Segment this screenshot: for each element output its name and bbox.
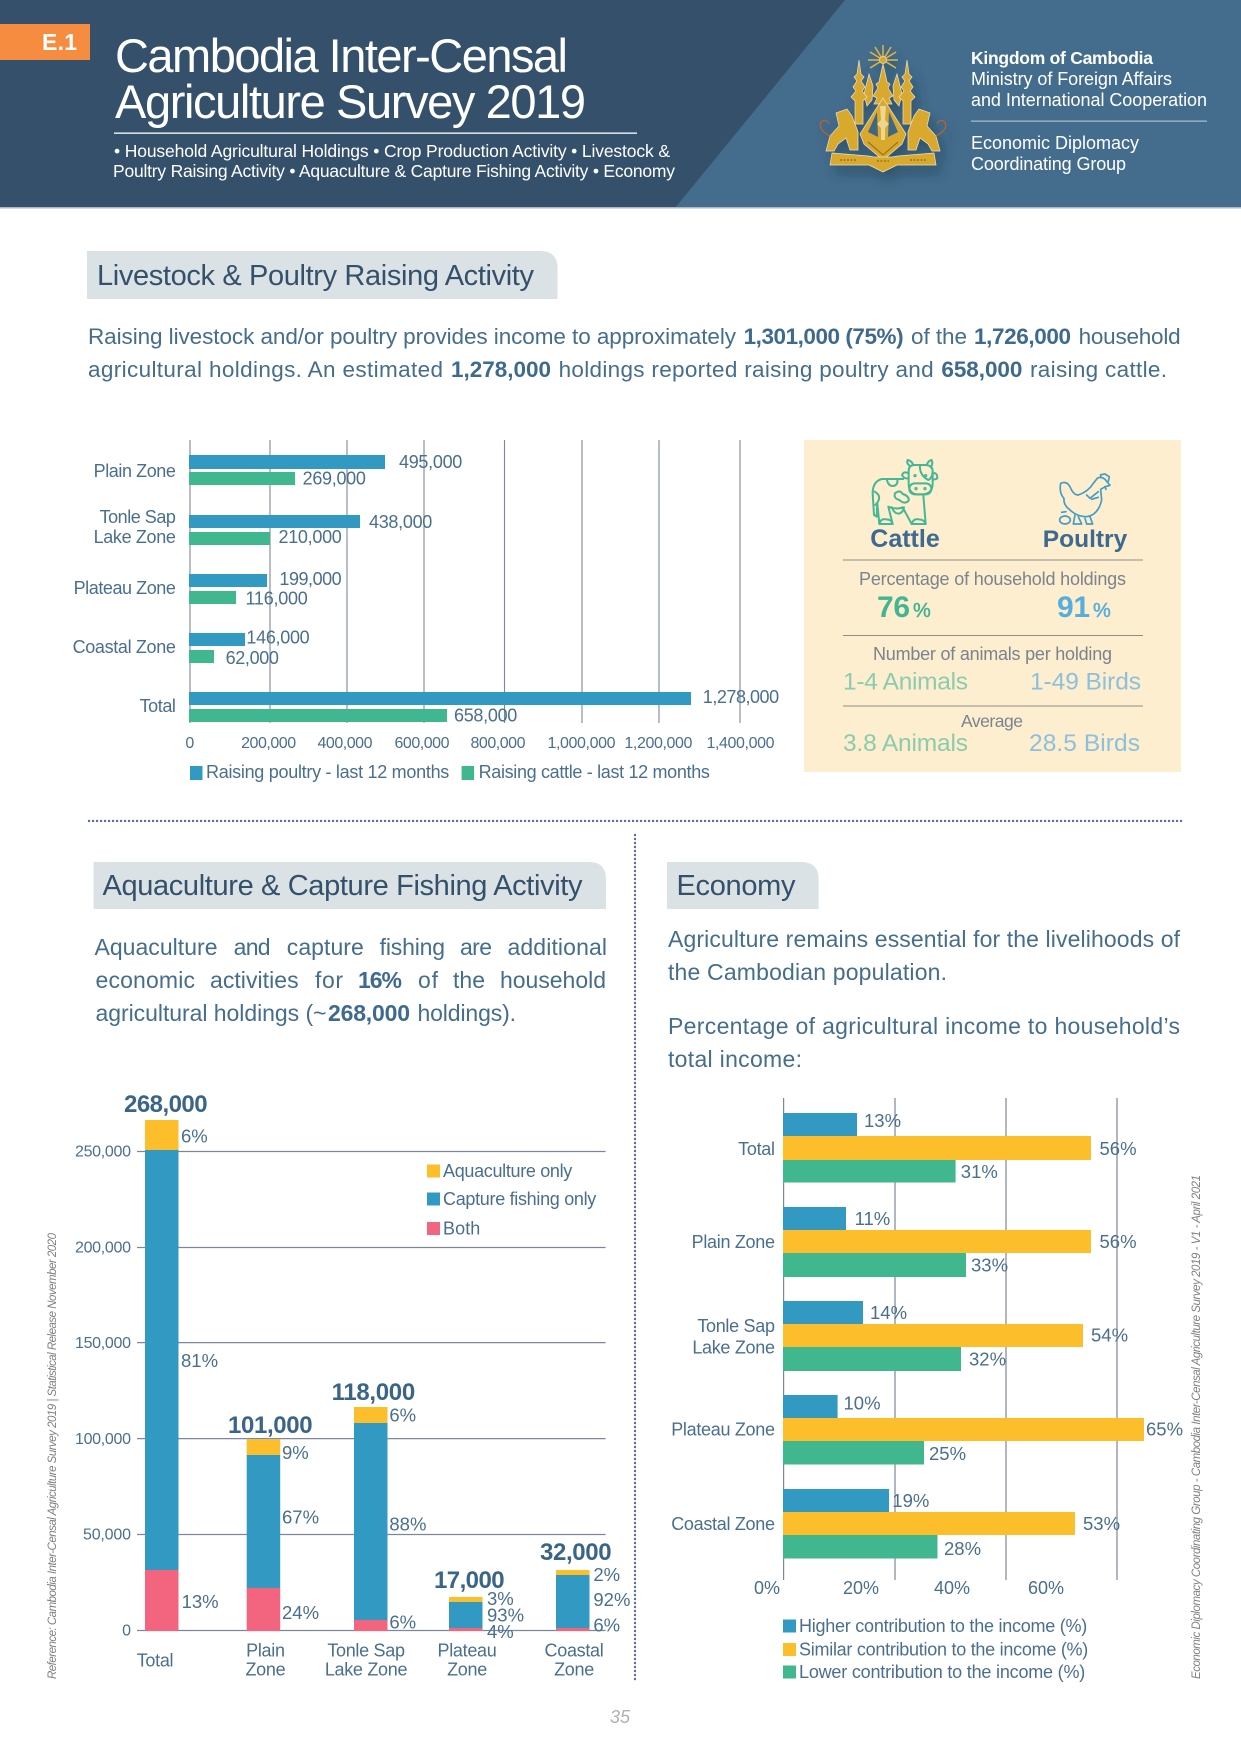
title: Agriculture Survey 2019 (115, 75, 586, 128)
zone labels: Plain Zone (94, 461, 176, 481)
percentage labels: 13% (182, 1591, 219, 1612)
title: Cambodia Inter-Censal (115, 29, 568, 82)
side note: reference: Reference: Cambodia Inter-Censal Agriculture Survey 2019 | Statistical Release November 2020 (47, 1232, 59, 1679)
gridlines (137, 1152, 606, 1630)
zone labels: Coastal Zone (73, 637, 176, 657)
value labels (844, 1110, 1183, 1559)
average animals: 28.5 Birds (1029, 730, 1140, 757)
text block: aquaculture intro: the (453, 967, 485, 993)
axis labels: 0 (185, 735, 194, 752)
text block: livestock intro: agricultural holdings. An estimated (88, 357, 443, 382)
y axis labels: 200,000 (75, 1240, 131, 1256)
totals: 32,000 (540, 1539, 611, 1566)
cattle bars (189, 472, 447, 722)
value labels: 54% (1091, 1324, 1128, 1346)
page number: 35 (610, 1707, 631, 1727)
text block: aquaculture intro: of (418, 967, 439, 993)
y axis labels: 150,000 (75, 1335, 131, 1352)
text block: livestock intro: holdings reported raising poultry and (559, 357, 934, 382)
higher contribution bars (783, 1113, 889, 1512)
average animals (843, 711, 1140, 757)
value labels: 269,000 (303, 468, 366, 488)
bar: Total (145, 1120, 178, 1631)
zone labels: Lake Zone (94, 527, 176, 547)
text block: livestock intro: raising cattle. (1030, 357, 1167, 382)
heading: Aquaculture & Capture Fishing Activity (94, 862, 606, 909)
value labels: 210,000 (278, 527, 342, 547)
value labels: 32% (969, 1348, 1006, 1370)
text block: aquaculture intro: additional (508, 934, 607, 960)
axis labels (754, 1578, 1064, 1598)
bar: Tonle Sap Lake Zone (354, 1407, 388, 1631)
zone labels: Lake Zone (692, 1338, 775, 1358)
value labels: 31% (961, 1161, 998, 1182)
bar chart: agricultural income share (671, 1098, 1183, 1682)
axis labels: 400,000 (318, 735, 373, 752)
text block: aquaculture intro: economic (96, 967, 195, 993)
text block: aquaculture intro: agricultural holdings (~ (96, 1000, 326, 1026)
y axis labels: 0 (122, 1622, 131, 1640)
zone labels: Total (137, 1650, 173, 1670)
zone labels: Zone (245, 1660, 286, 1680)
axis labels: 20% (843, 1578, 879, 1598)
value labels: 1,278,000 (703, 687, 779, 707)
y axis labels: 250,000 (75, 1144, 131, 1160)
zone labels: Plateau Zone (671, 1420, 775, 1440)
value labels: 56% (1100, 1138, 1137, 1159)
axis labels: 800,000 (470, 735, 526, 752)
zone labels: Zone (447, 1660, 487, 1680)
subtitle topics: • Household Agricultural Holdings • Crop Production Activity • Livestock & (114, 141, 670, 161)
animals per holding: 1-4 Animals (843, 668, 968, 696)
text block: livestock intro: Raising livestock and/or poultry provides income to approximately (88, 324, 737, 349)
value labels: 53% (1083, 1513, 1120, 1534)
totals: 268,000 (124, 1091, 207, 1118)
value labels: 65% (1146, 1418, 1183, 1440)
text block: livestock intro: 658,000 (941, 357, 1022, 382)
legend (783, 1616, 1088, 1682)
y axis labels (75, 1144, 131, 1640)
zone labels: Plain (246, 1640, 285, 1660)
text block: aquaculture intro: capture (287, 934, 364, 960)
zone labels: Coastal Zone (671, 1514, 775, 1534)
text block: aquaculture intro: and (234, 934, 271, 960)
text block: aquaculture intro: fishing (380, 934, 445, 960)
bar: Plateau Zone (449, 1597, 482, 1631)
value labels: 658,000 (454, 706, 517, 726)
subtitle topics: Poultry Raising Activity • Aquaculture & Capture Fishing Activity • Economy (113, 161, 675, 181)
text block: livestock intro: 1,726,000 (974, 324, 1071, 349)
text block: aquaculture intro: Aquaculture (94, 934, 218, 960)
axis labels (185, 735, 775, 752)
zone labels: Plain Zone (692, 1232, 775, 1252)
stacked bar chart: fishing activity by zone (75, 1091, 630, 1680)
animals per holding: 1-49 Birds (1030, 668, 1141, 696)
percentage labels: 6% (181, 1126, 208, 1146)
heading: Livestock & Poultry Raising Activity: Livestock & Poultry Raising Activity (97, 260, 534, 292)
header banner (0, 0, 1241, 208)
zone labels: Tonle Sap (327, 1640, 405, 1660)
percentage of holdings: Percentage of household holdings (859, 569, 1126, 589)
value labels (226, 452, 779, 726)
legend: Aquaculture only (443, 1161, 572, 1181)
text block: economy intro: Percentage of agricultural income to household’s (668, 1013, 1180, 1039)
value labels: 199,000 (279, 569, 342, 589)
bar: Plain Zone (247, 1439, 280, 1631)
percentage labels: 4% (487, 1621, 514, 1642)
value labels: 19% (892, 1490, 929, 1511)
value labels: 438,000 (369, 512, 432, 532)
zone labels (73, 461, 176, 716)
ministry text: Coordinating Group (971, 154, 1126, 174)
animals per holding: Number of animals per holding (873, 644, 1112, 664)
subtitle topics (113, 132, 675, 181)
value labels: 11% (855, 1208, 890, 1229)
average animals: 3.8 Animals (843, 730, 968, 757)
zone labels: Lake Zone (325, 1660, 407, 1680)
axis labels: 1,000,000 (548, 735, 616, 752)
legend: Similar contribution to the income (%) (799, 1640, 1088, 1660)
panel: cattle and poultry facts (804, 440, 1181, 772)
section badge (0, 24, 90, 60)
bar: Coastal Zone (556, 1570, 590, 1631)
axis labels: 1,200,000 (624, 735, 692, 752)
zone labels: Plateau (438, 1640, 496, 1660)
axis labels: 1,400,000 (706, 735, 775, 752)
value labels: 146,000 (246, 628, 310, 648)
zone labels: Total (738, 1139, 775, 1159)
percentage of holdings: 91 (1057, 591, 1090, 624)
value labels: 14% (870, 1302, 907, 1323)
legend: Both (443, 1218, 480, 1238)
ministry text (971, 48, 1207, 174)
text block: aquaculture intro: are (460, 934, 492, 960)
zone labels: Tonle Sap (697, 1316, 775, 1336)
heading: Economy: Economy (676, 870, 796, 902)
gridlines (784, 1098, 1117, 1580)
heading: Livestock & Poultry Raising Activity (87, 251, 558, 299)
text block: economy intro: Agriculture remains essential for the livelihoods of (668, 926, 1181, 952)
legend: Higher contribution to the income (%) (799, 1616, 1087, 1636)
value labels: 13% (864, 1110, 901, 1131)
ministry text: Economic Diplomacy (971, 133, 1139, 153)
percentage of holdings: % (913, 600, 931, 622)
text block: aquaculture intro: 268,000 (328, 1000, 410, 1026)
percentage labels: 67% (282, 1506, 319, 1528)
ministry text: and International Cooperation (971, 90, 1207, 110)
axis labels: 0% (754, 1578, 780, 1598)
text block: aquaculture intro: household (500, 967, 606, 993)
legend: Raising cattle - last 12 months (479, 762, 710, 782)
legend: Lower contribution to the income (%) (799, 1662, 1085, 1682)
icon: royal coat of arms (820, 45, 946, 172)
percentage labels: 9% (282, 1442, 309, 1463)
lower contribution bars (783, 1160, 966, 1558)
animals per holding (843, 644, 1141, 696)
column titles (870, 525, 1128, 553)
text block: aquaculture intro: 16% (358, 967, 402, 993)
text block: economy intro: the Cambodian population. (668, 959, 947, 985)
legend: Raising poultry - last 12 months (206, 762, 449, 782)
value labels: 495,000 (399, 452, 462, 472)
title (115, 29, 586, 128)
column titles: Cattle (870, 525, 940, 553)
ministry text: Kingdom of Cambodia (971, 48, 1153, 68)
y axis labels: 50,000 (83, 1526, 131, 1544)
similar contribution bars (783, 1136, 1144, 1535)
text block: livestock intro: household (1079, 324, 1181, 349)
average animals: Average (961, 711, 1023, 731)
zone labels: Plateau Zone (74, 578, 176, 598)
zone labels: Zone (554, 1660, 594, 1680)
text block: livestock intro: 1,278,000 (451, 357, 551, 382)
axis labels: 60% (1028, 1578, 1064, 1598)
axis labels: 200,000 (241, 735, 296, 752)
text block: economy intro: total income: (668, 1046, 802, 1072)
axis labels: 40% (934, 1578, 970, 1598)
legend (190, 762, 710, 782)
axis labels: 600,000 (394, 735, 450, 752)
percentage labels: 3% (487, 1588, 514, 1609)
value labels: 116,000 (246, 588, 308, 608)
percentage labels: 2% (593, 1564, 620, 1585)
text block: aquaculture intro (94, 934, 607, 1026)
value labels: 33% (971, 1254, 1008, 1276)
percentage labels: 6% (593, 1614, 620, 1636)
totals (124, 1091, 611, 1594)
legend (427, 1161, 596, 1238)
zone labels: Total (140, 696, 176, 716)
totals: 118,000 (332, 1379, 415, 1406)
zone labels (671, 1139, 775, 1534)
legend: Capture fishing only (443, 1189, 596, 1209)
totals: 17,000 (434, 1567, 504, 1594)
percentage labels (181, 1126, 630, 1642)
icon: cow (873, 460, 937, 524)
value labels: 56% (1100, 1231, 1137, 1252)
text block: livestock intro: of the (911, 324, 967, 349)
zone labels: Tonle Sap (100, 507, 176, 527)
text block: livestock intro (88, 324, 1181, 382)
y axis labels: 100,000 (75, 1431, 131, 1448)
text block: aquaculture intro: holdings). (418, 1000, 516, 1026)
icon: hen (1060, 474, 1110, 524)
zone labels (137, 1640, 603, 1680)
percentage labels: 93% (487, 1604, 524, 1626)
side note: version: Economic Diplomacy Coordinating Group - Cambodia Inter-Censal Agriculture Survey 2019 - V1 - April 2021 (1191, 1175, 1203, 1679)
percentage labels: 6% (389, 1404, 416, 1426)
percentage labels: 81% (181, 1350, 218, 1371)
totals: 101,000 (228, 1412, 312, 1439)
column titles: Poultry (1043, 526, 1128, 553)
section badge: E.1 (42, 29, 77, 55)
zone labels: Coastal (545, 1640, 603, 1660)
percentage of holdings (859, 569, 1126, 624)
percentage of holdings: 76 (877, 591, 910, 624)
text block: aquaculture intro: activities (210, 967, 299, 993)
percentage labels: 6% (389, 1612, 416, 1632)
text block: livestock intro: 1,301,000 (75%) (744, 324, 904, 349)
percentage labels: 88% (389, 1514, 426, 1534)
text block: economy intro (668, 926, 1181, 1072)
text block: aquaculture intro: for (315, 967, 343, 993)
heading: Aquaculture & Capture Fishing Activity: Aquaculture & Capture Fishing Activity (102, 870, 583, 902)
value labels: 10% (844, 1392, 881, 1414)
gridlines (190, 440, 740, 723)
value labels: 62,000 (226, 648, 279, 668)
percentage of holdings: % (1093, 600, 1111, 622)
percentage labels: 92% (593, 1589, 630, 1610)
heading: Economy (667, 862, 819, 909)
ministry text: Ministry of Foreign Affairs (971, 69, 1172, 89)
value labels: 25% (929, 1443, 966, 1464)
value labels: 28% (944, 1538, 981, 1559)
poultry bars (189, 455, 691, 705)
percentage labels: 24% (282, 1602, 319, 1623)
bar chart: livestock by zone (73, 440, 779, 782)
